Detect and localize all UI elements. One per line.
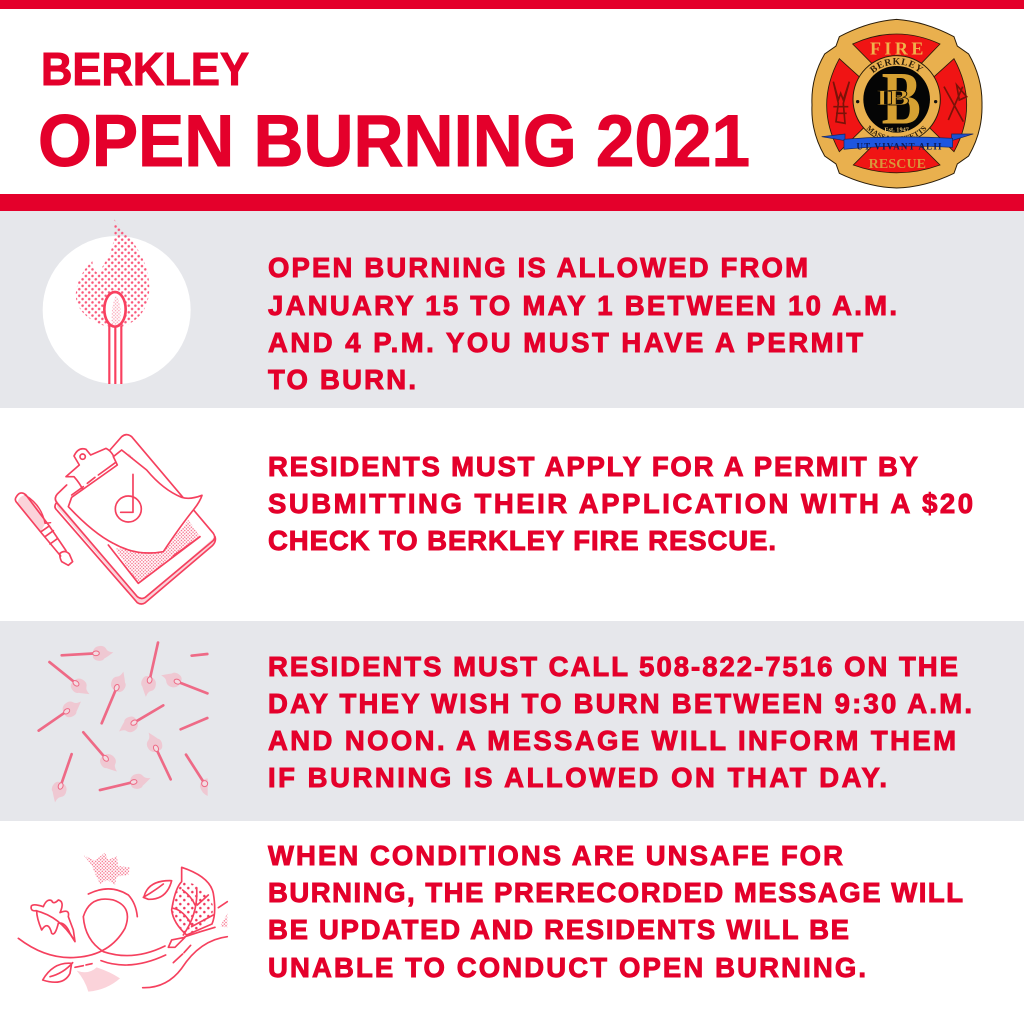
panel: permit application	[15, 435, 973, 604]
text: burn dates	[268, 252, 897, 395]
top red rule	[0, 0, 1024, 9]
badge center seal	[853, 56, 940, 143]
title line: Open Burning 2021: OPEN BURNING 2021	[38, 101, 750, 182]
text: call before burning: IF BURNING IS ALLOWED ON THAT DAY.	[268, 762, 887, 793]
text: call before burning: DAY THEY WISH TO BURN BETWEEN 9:30 A.M.	[268, 688, 972, 719]
text: permit application: CHECK TO BERKLEY FIRE RESCUE.	[268, 525, 776, 556]
icon: clipboard and pen	[15, 435, 216, 604]
text: permit application: RESIDENTS MUST APPLY FOR A PERMIT BY	[268, 451, 918, 482]
text: permit application	[268, 451, 973, 556]
panel background	[0, 211, 1024, 408]
badge monogram: B	[882, 57, 921, 140]
text: unsafe conditions: BURNING, THE PRERECORDED MESSAGE WILL	[268, 877, 963, 908]
title	[38, 43, 750, 182]
text: call before burning	[268, 651, 972, 793]
text: unsafe conditions: BE UPDATED AND RESIDENTS WILL BE	[268, 914, 849, 945]
icon: scattered matches	[35, 641, 210, 805]
text: call before burning: AND NOON. A MESSAGE WILL INFORM THEM	[268, 725, 956, 756]
badge red panels	[827, 34, 967, 173]
text: unsafe conditions: UNABLE TO CONDUCT OPEN BURNING.	[268, 952, 866, 983]
pen	[15, 493, 73, 565]
text: burn dates: AND 4 P.M. YOU MUST HAVE A PERMIT	[268, 327, 863, 358]
logo: Berkley Fire Rescue badge: IB	[876, 85, 910, 110]
text: burn dates: OPEN BURNING IS ALLOWED FROM	[268, 252, 808, 283]
title line: Berkley: BERKLEY	[41, 43, 249, 95]
text: permit application: SUBMITTING THEIR APPLICATION WITH A $20	[268, 488, 973, 519]
badge ring text: BERKLEY	[869, 58, 924, 74]
badge banner	[822, 134, 973, 141]
logo: Berkley Fire Rescue badge	[811, 18, 982, 188]
logo: Berkley Fire Rescue badge: Est. 1947	[884, 126, 910, 133]
logo: Berkley Fire Rescue badge: UT VIVANT ALII	[856, 141, 942, 151]
panel: call before burning	[0, 621, 1024, 821]
badge stars	[856, 100, 859, 103]
logo: Berkley Fire Rescue badge: MASSACHUSETTS	[866, 125, 926, 137]
text: burn dates: TO BURN.	[268, 364, 416, 395]
panel: burn dates	[0, 211, 1024, 408]
badge tools	[833, 82, 967, 123]
text: unsafe conditions: WHEN CONDITIONS ARE UNSAFE FOR	[268, 840, 843, 871]
text: call before burning: RESIDENTS MUST CALL 508-822-7516 ON THE	[268, 651, 958, 682]
logo: Berkley Fire Rescue badge: RESCUE	[869, 157, 926, 172]
icon: lit match	[43, 218, 191, 384]
header red band	[0, 194, 1024, 211]
badge lettering: FIRE	[870, 39, 923, 59]
icon: windblown leaves	[18, 853, 227, 992]
panel background	[0, 621, 1024, 821]
text: burn dates: JANUARY 15 TO MAY 1 BETWEEN 10 A.M.	[268, 290, 897, 321]
text: unsafe conditions	[268, 840, 963, 983]
panel: unsafe conditions	[18, 840, 963, 992]
